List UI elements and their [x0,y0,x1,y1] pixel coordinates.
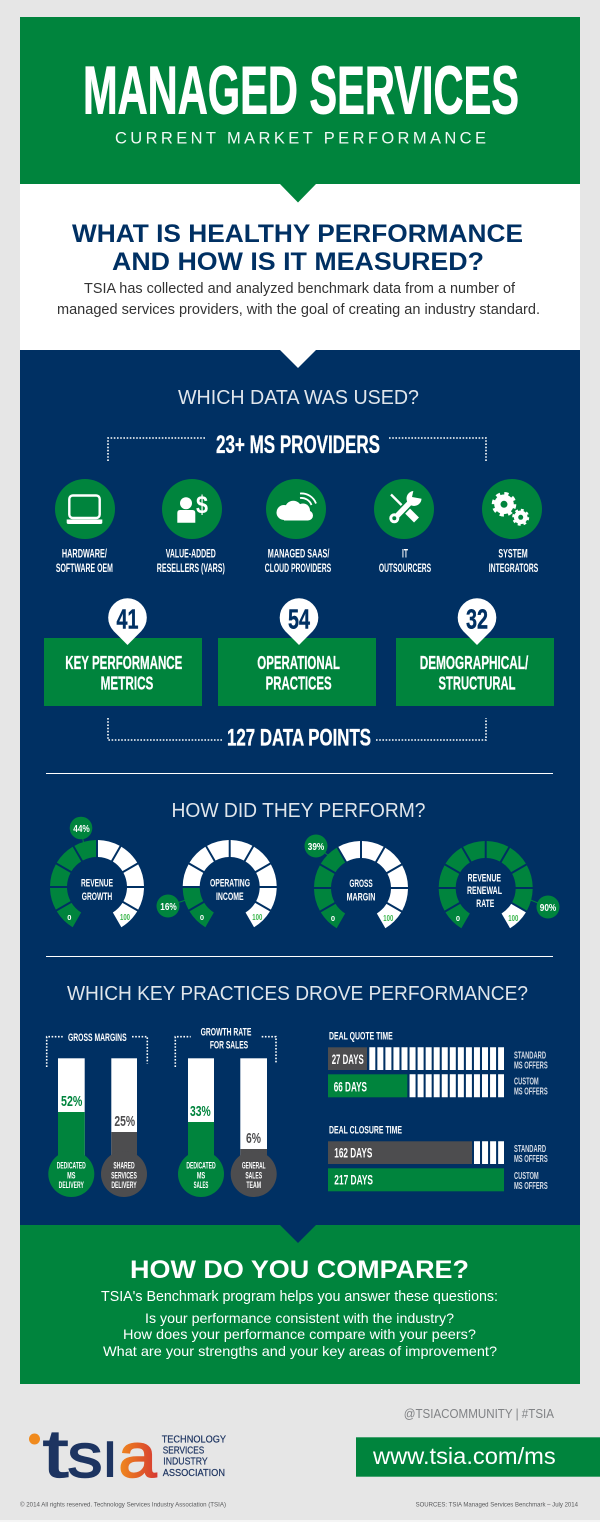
arrow: banner pointer [280,184,316,202]
logo: TSIA: INDUSTRY [163,1456,208,1468]
logo: TSIA: SERVICES [163,1444,204,1456]
gauge: gross margin 39%: 0 [331,914,335,923]
heading: healthy performance: AND HOW IS IT MEASURED? [112,248,484,276]
arrow: navy pointer [280,1225,316,1243]
pin: 41 [108,598,147,645]
card: operational practices: PRACTICES [266,674,332,694]
legend: quote offers [514,1050,548,1098]
copyright: © 2014 All rights reserved. Technology Services Industry Association (TSIA) [20,1502,226,1509]
gauge: revenue growth 44%: GROWTH [82,891,112,903]
icon: gears [493,494,528,525]
thermometer: dedicated MS sales 33%: DEDICATED [186,1160,216,1171]
thermometer: dedicated MS sales 33%: MS [197,1170,205,1181]
text block: intro paragraph [57,281,540,318]
provider: managed SaaS [265,479,331,575]
provider: system integrators: INTEGRATORS [489,563,538,575]
bar: standard 162 days [328,1141,504,1164]
pin: 41: 41 [116,604,138,634]
thermometer: dedicated MS delivery 52%: MS [67,1170,75,1181]
gauge: operating income 16%: 0 [200,913,204,922]
legend: closure offers: MS OFFERS [514,1181,548,1192]
text block: intro paragraph: TSIA has collected and analyzed benchmark data from a number of [84,281,516,297]
gauge: gross margin 39%: 100 [383,914,394,923]
subtitle: CURRENT MARKET PERFORMANCE [115,130,486,148]
heading: healthy performance: WHAT IS HEALTHY PERFORMANCE [72,220,523,248]
provider: value-added resellers [157,479,225,575]
thermometer: general sales team 6% [231,1058,277,1197]
gauge: operating income 16%: INCOME [216,891,244,903]
thermometer: shared services delivery 25% [101,1058,147,1197]
provider: system integrators [482,479,542,575]
text block: benchmark questions [101,1289,498,1359]
chart: gross margins [47,1032,147,1197]
thermometer: dedicated MS sales 33% [178,1058,224,1197]
pin: 32: 32 [466,604,488,634]
thermometer: general sales team 6%: GENERAL [242,1160,266,1171]
thermometer: dedicated MS delivery 52%: DELIVERY [59,1180,84,1191]
gauge: revenue growth 44%: 0 [67,913,71,922]
icon: person with dollar: $ [196,491,208,519]
heading: which key practices: WHICH KEY PRACTICES DROVE PERFORMANCE? [67,983,528,1005]
bar: standard 27 days: 27 DAYS [332,1052,364,1067]
bar: custom 217 days [328,1168,504,1191]
gauge: revenue renewal rate 90% [434,836,560,931]
logo: TSIA: s [68,1422,102,1491]
gauge: gross margin 39%: MARGIN [347,892,375,904]
icon: cloud with signal [276,493,316,520]
card: operational practices: OPERATIONAL [257,653,340,673]
thermometer: dedicated MS delivery 52% [48,1058,94,1197]
heading: healthy performance [72,220,523,276]
gauge: revenue renewal rate 90%: REVENUE [468,873,501,885]
card: demographical structural: DEMOGRAPHICAL/ [420,653,528,673]
legend: closure offers: CUSTOM [514,1171,539,1182]
callout: 90%: 90% [540,902,557,914]
thermometer: general sales team 6%: 6% [246,1130,261,1147]
provider: hardware software OEM: SOFTWARE OEM [56,563,113,575]
logo: TSIA [29,1416,226,1492]
legend: closure offers: MS OFFERS [514,1154,548,1165]
website banner [356,1437,600,1477]
card: operational practices [218,598,376,706]
arrow: intro pointer [280,350,316,368]
gauge: revenue renewal rate 90%: 0 [456,914,460,923]
legend: quote offers: MS OFFERS [514,1087,548,1098]
heading: gross margins bracket: GROSS MARGINS [68,1032,127,1044]
total: 127 data points with bracket: 127 DATA POINTS [227,724,371,752]
gauge: revenue renewal rate 90%: RENEWAL [467,885,502,897]
text block: benchmark questions: Is your performance consistent with the industry? [145,1310,454,1326]
card: key performance metrics: METRICS [101,674,153,694]
legend: closure offers: STANDARD [514,1144,546,1155]
provider: IT outsourcers: IT [402,548,408,560]
thermometer: general sales team 6%: TEAM [246,1180,261,1191]
pin: 54 [280,598,318,645]
card: key performance metrics: KEY PERFORMANCE [65,653,182,673]
sources: SOURCES: TSIA Managed Services Benchmark – July 2014 [416,1503,579,1509]
chart: deal closure time: DEAL CLOSURE TIME [329,1125,402,1137]
thermometer: shared services delivery 25%: DELIVERY [111,1180,137,1191]
heading: providers with bracket: 23+ MS PROVIDERS [216,431,380,459]
logo: TSIA: I [104,1431,116,1489]
callout: 39%: 39% [308,841,325,853]
panel: how do you compare [20,1225,580,1384]
bar: custom 66 days [328,1074,504,1097]
provider: managed SaaS: CLOUD PROVIDERS [265,563,331,575]
provider: hardware software OEM: HARDWARE/ [62,548,107,560]
logo: TSIA: t [42,1416,69,1492]
gauge: operating income 16%: 100 [252,913,263,922]
panel: intro [20,184,580,350]
chart: deal quote time [328,1030,548,1098]
card: demographical structural: STRUCTURAL [438,674,516,694]
gauge: operating income 16% [156,835,282,930]
gauge: revenue renewal rate 90%: RATE [476,898,494,910]
logo: TSIA: TECHNOLOGY [162,1434,226,1446]
callout: 16%: 16% [160,901,177,913]
card: demographical structural [396,598,554,706]
gauge: gross margin 39%: GROSS [349,878,373,890]
pin: 54: 54 [288,604,310,634]
social handles: @TSIACOMMUNITY | #TSIA [404,1407,555,1421]
logo: TSIA: a [118,1422,157,1491]
provider: IT outsourcers [374,479,434,575]
card: key performance metrics [44,598,202,706]
thermometer: dedicated MS sales 33%: SALES [194,1180,208,1191]
chart: growth rate for sales [175,1027,277,1197]
provider: value-added resellers: RESELLERS (VARS) [157,563,225,575]
provider: value-added resellers: VALUE-ADDED [166,548,216,560]
thermometer: shared services delivery 25%: SHARED [113,1160,135,1171]
thermometer: shared services delivery 25%: 25% [114,1113,135,1130]
thermometer: general sales team 6%: SALES [245,1170,262,1181]
logo: TSIA: ASSOCIATION [163,1467,225,1479]
bar: custom 217 days: 217 DAYS [334,1173,373,1188]
gauge: revenue growth 44%: 100 [120,913,130,922]
heading: how do you compare: HOW DO YOU COMPARE? [130,1256,469,1284]
heading: growth rate bracket: FOR SALES [210,1039,248,1051]
thermometer: dedicated MS delivery 52%: 52% [61,1093,82,1110]
heading: growth rate bracket [175,1027,276,1067]
bar: standard 162 days: 162 DAYS [334,1145,372,1160]
legend: closure offers [514,1144,548,1192]
thermometer: shared services delivery 25%: SERVICES [111,1170,137,1181]
text block: benchmark questions: TSIA's Benchmark program helps you answer these questions: [101,1289,498,1305]
heading: gross margins bracket [47,1032,147,1067]
gauge: revenue renewal rate 90%: 100 [508,914,519,923]
provider: hardware software OEM [55,479,115,575]
gauge: revenue growth 44% [45,817,149,930]
text block: benchmark questions: How does your performance compare with your peers? [123,1326,476,1342]
heading: how did they perform: HOW DID THEY PERFORM? [172,800,426,822]
legend: quote offers: STANDARD [514,1050,546,1061]
heading: which data was used: WHICH DATA WAS USED? [178,387,419,409]
icon: laptop [67,496,102,524]
gauge: operating income 16%: OPERATING [210,878,250,890]
text block: benchmark questions: What are your strengths and your key areas of improvement? [103,1343,497,1359]
legend: quote offers: CUSTOM [514,1077,539,1088]
gauge: revenue growth 44%: REVENUE [81,878,113,890]
thermometer: dedicated MS sales 33%: 33% [190,1103,211,1120]
provider: system integrators: SYSTEM [498,548,528,560]
heading: growth rate bracket: GROWTH RATE [201,1027,251,1039]
gauge: gross margin 39% [304,834,413,931]
callout: 44%: 44% [73,823,90,835]
chart: deal closure time [328,1125,548,1192]
bar: standard 27 days [328,1047,504,1070]
bar: custom 66 days: 66 DAYS [334,1079,367,1094]
text block: intro paragraph: managed services providers, with the goal of creating an industry standard. [57,302,540,318]
total: 127 data points with bracket [108,718,486,752]
panel: data and performance [20,350,580,1225]
provider: managed SaaS: MANAGED SAAS/ [268,548,330,560]
website banner: www.tsia.com/ms [372,1443,556,1469]
icon: wrench and screwdriver [389,488,423,523]
heading: providers with bracket [108,431,486,461]
thermometer: dedicated MS delivery 52%: DEDICATED [57,1160,86,1171]
pin: 32 [458,598,496,645]
provider: IT outsourcers: OUTSOURCERS [379,563,431,575]
chart: deal quote time: DEAL QUOTE TIME [329,1030,393,1042]
panel: title banner [20,17,580,184]
legend: quote offers: MS OFFERS [514,1060,548,1071]
